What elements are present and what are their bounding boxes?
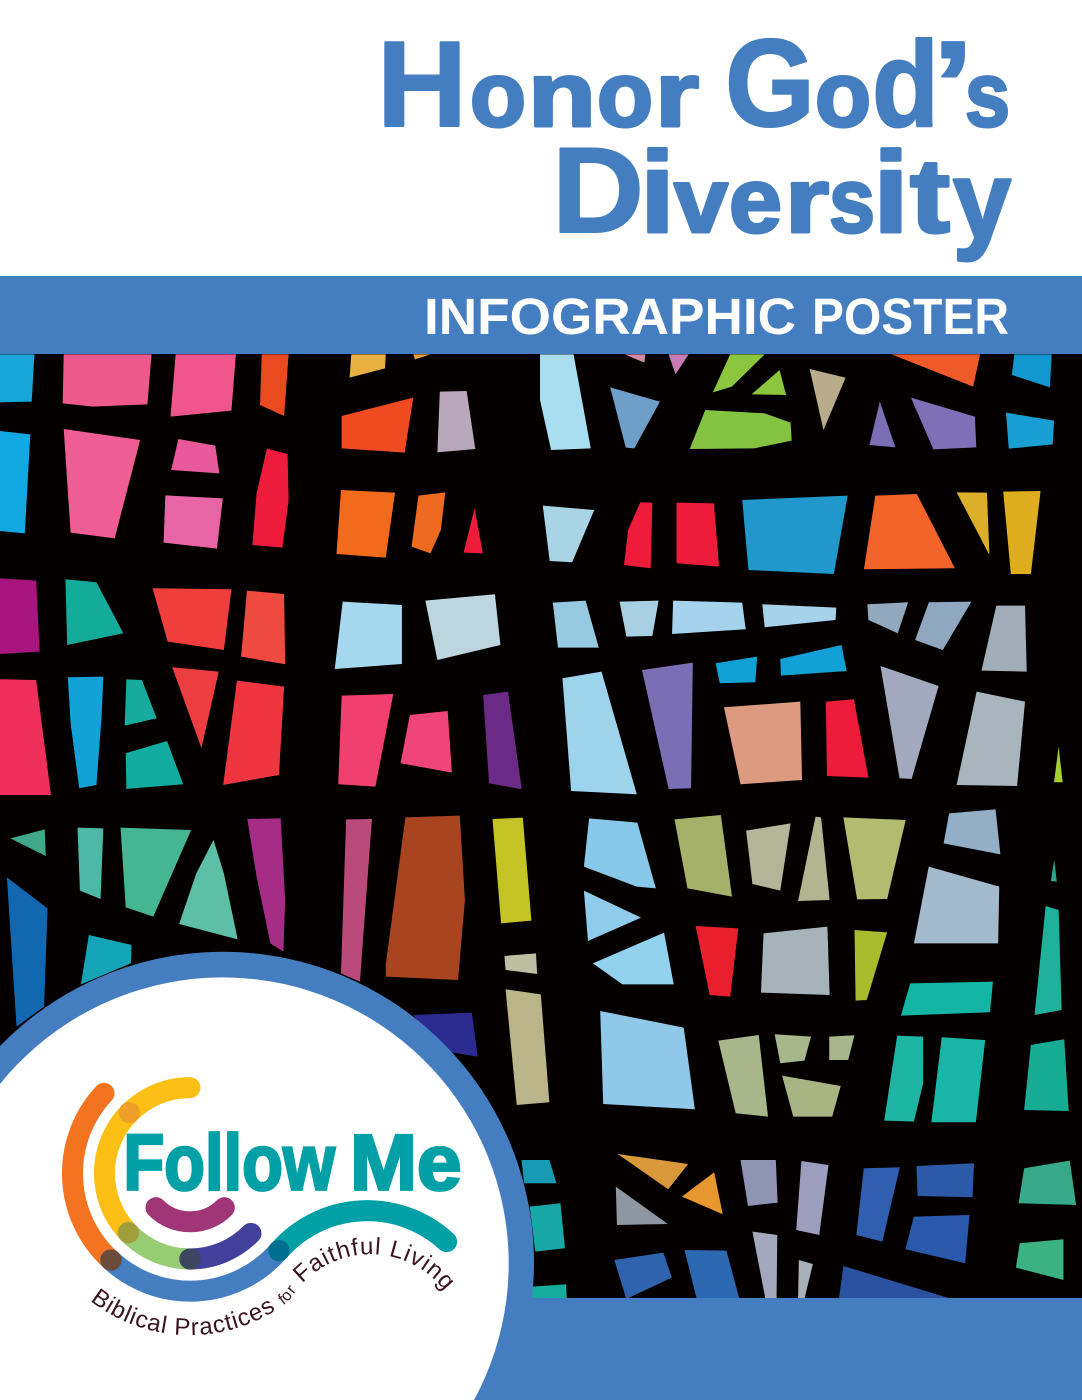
title: v	[674, 150, 728, 252]
glass panes: lower left	[7, 816, 531, 1057]
title: t	[910, 138, 950, 255]
logo circle ring	[0, 952, 534, 1298]
subtitle band: INFOGRAPHIC	[424, 288, 796, 345]
title: r	[655, 44, 699, 146]
logo wordmark: Me	[350, 1118, 462, 1206]
logo wordmark: Follow	[123, 1118, 336, 1206]
title: G	[725, 15, 815, 153]
title: e	[729, 150, 782, 252]
logo circle white	[0, 977, 509, 1400]
icon: rainbow arcs	[72, 1088, 447, 1291]
title: d	[872, 16, 939, 152]
title: o	[597, 44, 653, 146]
glass panes: lower right	[504, 809, 1076, 1299]
bottom band	[0, 1298, 1082, 1400]
title: o	[815, 44, 871, 146]
title: o	[470, 44, 526, 146]
title: D	[552, 122, 644, 258]
subtitle band: POSTER	[812, 288, 1009, 345]
title: n	[528, 44, 596, 146]
subtitle band	[0, 276, 1082, 354]
title	[377, 15, 1011, 262]
logo tagline: Biblical Practices for Faithful Living	[92, 1237, 454, 1336]
Follow Me logo	[62, 1077, 462, 1336]
title: i	[873, 129, 909, 257]
title: r	[785, 150, 829, 252]
title: ’	[932, 16, 974, 152]
title: s	[965, 44, 1010, 146]
title: H	[377, 16, 467, 152]
glass panes: upper left	[0, 354, 522, 795]
stained glass photo	[0, 354, 1082, 1299]
glass panes: upper right	[540, 354, 1063, 794]
title: y	[953, 139, 1011, 262]
title: i	[640, 129, 675, 257]
title: s	[829, 150, 875, 252]
